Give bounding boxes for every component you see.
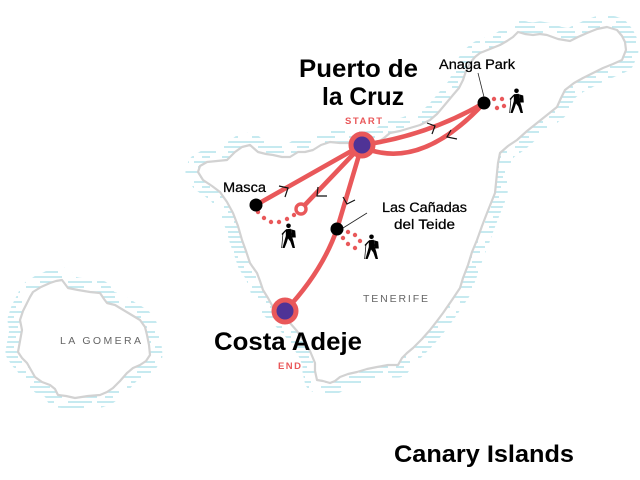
stop: Puerto de la Cruz marker [351, 134, 373, 156]
label: START: START [345, 116, 382, 127]
stop: open ring marker [296, 204, 306, 214]
island label: Tenerife: TENERIFE [363, 293, 428, 305]
heading: Puerto de la Cruz [299, 55, 418, 111]
icon: hiker near Las Canadas [364, 234, 379, 259]
label: Las Canadas del Teide: del Teide [394, 217, 455, 232]
heading: Puerto de la Cruz: Puerto de [299, 55, 418, 83]
label: Masca: Masca [223, 180, 267, 195]
stop: Las Canadas del Teide [330, 222, 344, 236]
island label: La Gomera: LA GOMERA [60, 335, 141, 347]
label: Las Canadas del Teide [382, 200, 467, 232]
island: Tenerife [198, 27, 626, 383]
stop: Anaga Park [478, 96, 490, 110]
stop: Costa Adeje marker [274, 300, 296, 322]
route lines [256, 103, 484, 311]
dotted hiking trails [256, 97, 506, 250]
title: Canary Islands: Canary Islands [394, 441, 574, 468]
icon: hiker near Anaga Park [509, 88, 524, 113]
direction arrows [279, 123, 457, 204]
heading: Puerto de la Cruz: la Cruz [322, 83, 404, 111]
icon: hiker near Masca [281, 224, 296, 248]
leader lines [343, 73, 484, 228]
label: Anaga Park: Anaga Park [439, 57, 515, 72]
stop: Masca [250, 198, 262, 212]
label: END: END [278, 361, 301, 372]
island: La Gomera [18, 280, 150, 398]
label: Las Canadas del Teide: Las Cañadas [382, 200, 467, 215]
heading: Costa Adeje: Costa Adeje [214, 328, 362, 356]
